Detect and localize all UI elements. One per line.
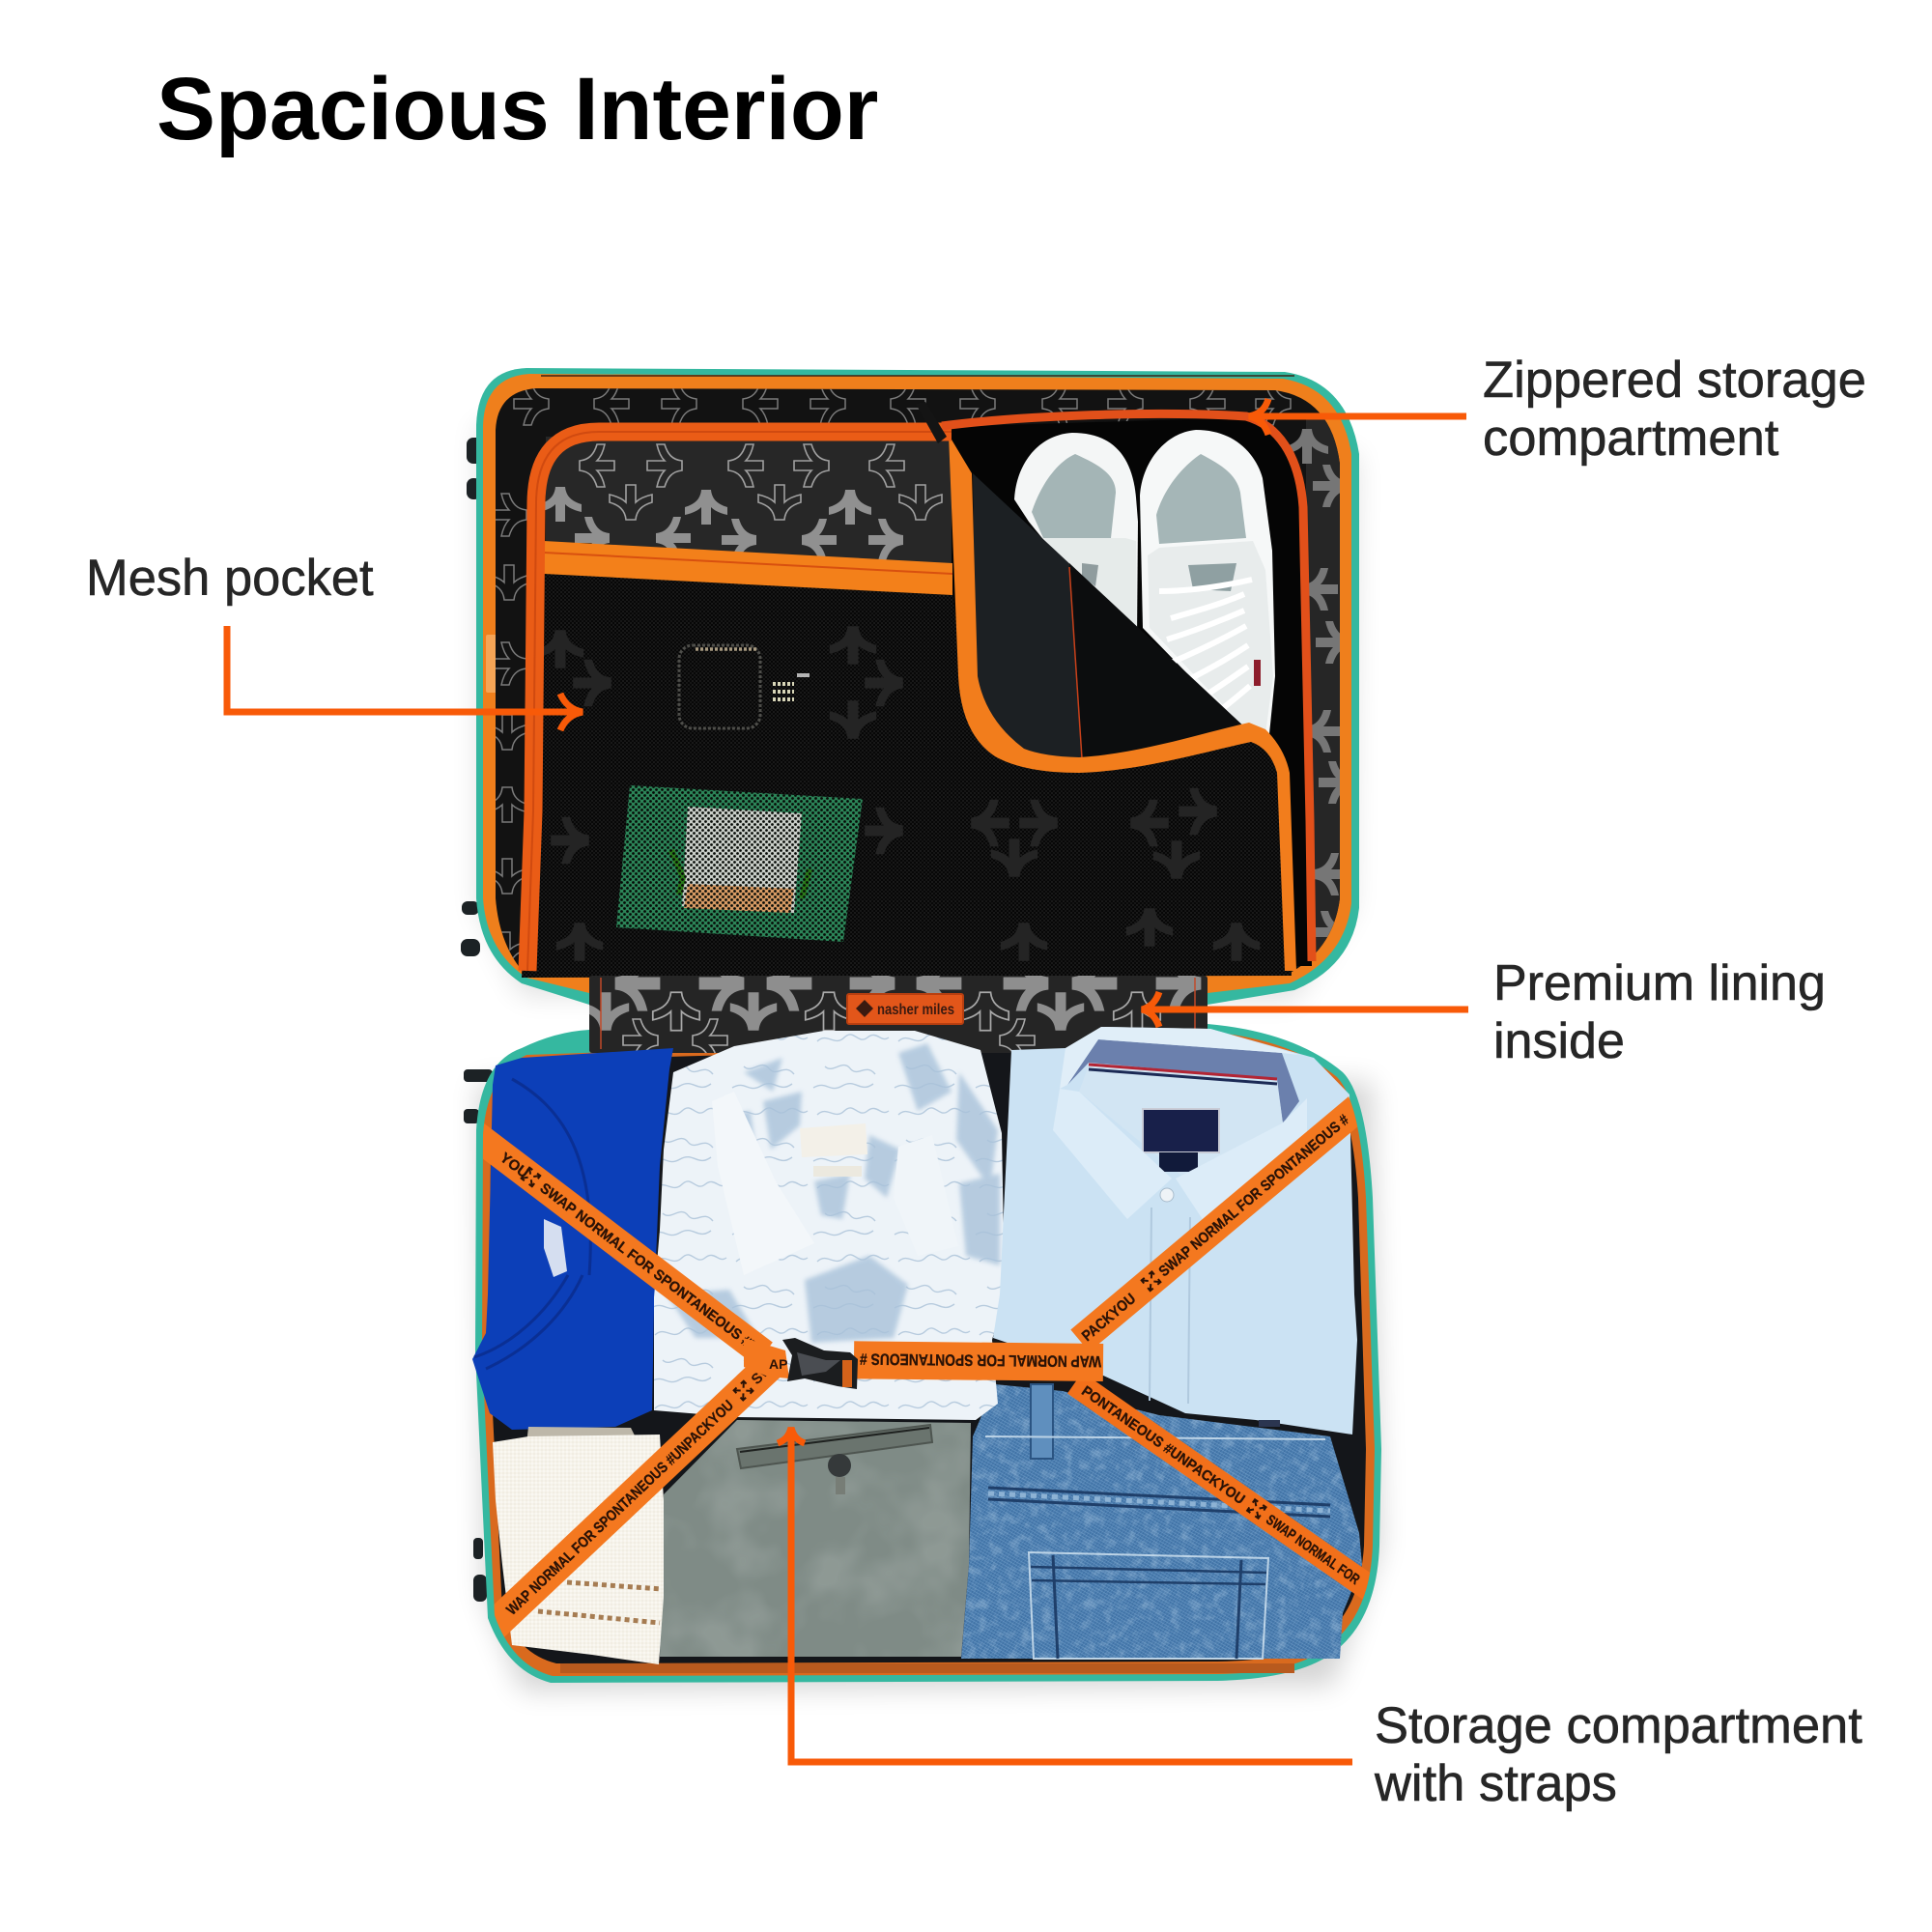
label: compartment [1483,410,1779,467]
mesh panel [522,570,1292,978]
icon: left shoe [1014,433,1138,638]
suitcase: base [451,955,1387,1690]
label: with straps [1374,1755,1617,1812]
pocket seams [1031,1567,1266,1584]
shirt print patches [667,1043,1000,1343]
strap: upper right: PACKYOU [1079,1291,1139,1345]
waist seam [985,1436,1325,1439]
yoke [988,1488,1330,1517]
shadow of lid [478,425,1357,1000]
strap: centre: WAP NORMAL FOR SPONTANEOUS # [860,1350,1101,1370]
pocket [1029,1552,1268,1659]
buckle [782,1338,858,1389]
blue tee [472,1048,673,1430]
interior of base [490,1041,1366,1663]
collar flaps [1053,1089,1172,1219]
wheels of lid [461,438,483,956]
belt loop [1031,1384,1053,1459]
strap: upper right: SWAP NORMAL FOR SPONTANEOUS # [1156,1112,1352,1280]
shadow of base [478,1082,1381,1690]
grey trousers [660,1420,971,1657]
pocket contents: glass box [679,645,810,728]
light blue shirt [993,1027,1357,1435]
upper zip pocket [546,437,952,570]
strap: centre [854,1341,1103,1381]
suitcase: top lid [461,368,1359,1005]
collar stripes [1089,1065,1277,1079]
callout: premium lining [1142,955,1826,1069]
lining of lid [496,388,1340,976]
label: Premium lining [1493,955,1826,1011]
orange flap edge [949,435,1296,971]
zipper: shoe compartment [942,413,1312,961]
rim top seam [541,375,1294,377]
bottom rim band [560,1663,1294,1673]
title: Spacious Interior [156,60,878,158]
arrow [778,1428,1352,1762]
laces [1159,580,1252,717]
strap: upper left [483,1123,773,1357]
zipper teeth line [527,432,952,971]
inner collar band [1067,1039,1299,1123]
strap stub at buckle [744,1338,789,1378]
band stitching [601,978,1195,1049]
lining arrows [484,383,1353,985]
pocket lining arrows [539,444,942,561]
label: inside [1493,1013,1625,1069]
flap [973,473,1249,763]
straps [451,1091,1387,1641]
arrow [1249,399,1466,435]
arrow [227,626,582,730]
shoe compartment [942,417,1312,966]
printed shirt [654,1031,1005,1420]
strap: upper right [1070,1096,1358,1344]
zipper: pocket outline [527,432,952,971]
callout: zippered storage compartment [1249,352,1866,467]
strap: upper left: YOU [497,1150,531,1181]
jeans [961,1384,1362,1659]
wheels of base [464,1069,493,1602]
orange pocket band [544,541,952,595]
zip puller [916,402,947,443]
teal shell of lid [476,368,1359,1005]
strap: lower right: SWAP NORMAL FOR [1263,1512,1363,1588]
callout: storage compartment with straps [778,1428,1862,1812]
icon: right shoe [1140,430,1275,744]
strap: lower left: SW [749,1359,777,1388]
label: Zippered storage [1483,352,1866,409]
arrow [1142,992,1468,1027]
orange rim of base [482,1032,1375,1676]
brand label: nasher miles [877,1002,954,1018]
label: Mesh pocket [86,550,374,607]
tag [800,1123,867,1157]
brand label [847,994,963,1024]
teal shell of base [475,1024,1381,1683]
strap stub at buckle: AP [769,1356,787,1372]
faint arrows behind mesh [537,626,1260,961]
band zip line [544,553,952,574]
strap: upper left: SWAP NORMAL FOR SPONTANEOUS #U [537,1180,762,1356]
right side lining [1306,419,1340,952]
latch [486,635,497,693]
inner neck [1079,1065,1283,1176]
neck tag [1143,1109,1219,1152]
strap: lower right [1067,1381,1370,1600]
divider band [589,976,1208,1053]
strap: lower right: PONTANEOUS #UNPACKYOU [1078,1383,1248,1508]
collar stand [1060,1027,1299,1089]
strap: lower left: WAP NORMAL FOR SPONTANEOUS #UNPACKYOU [503,1397,737,1619]
callout: mesh pocket [86,550,582,730]
pocket contents: green pouch [616,785,863,942]
label: Storage compartment [1375,1697,1862,1754]
orange rim of lid [483,374,1351,993]
shirt collar flaps [712,1092,814,1275]
towel [493,1427,664,1664]
